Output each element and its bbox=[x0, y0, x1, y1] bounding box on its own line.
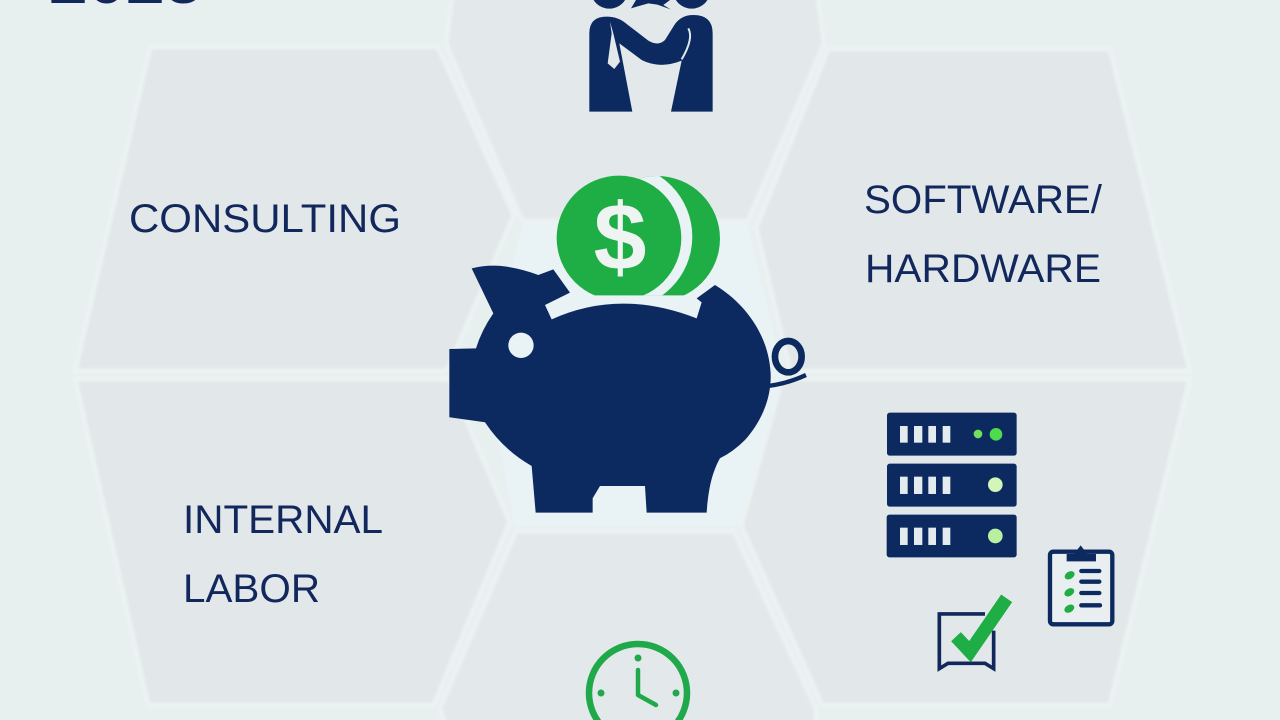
panel: internal labor hexagon bbox=[75, 379, 510, 705]
panel: central hexagon bbox=[486, 224, 784, 526]
panel: top hexagon bbox=[446, 0, 824, 221]
server unit 3 bbox=[887, 515, 1017, 557]
pig tail bbox=[768, 341, 806, 386]
icon: checkbox with checkmark bbox=[939, 598, 1007, 669]
icon: piggy bank bbox=[449, 266, 806, 513]
text: internal labor: INTERNAL bbox=[183, 498, 383, 542]
text: consulting: CONSULTING bbox=[129, 197, 401, 241]
icon: clipboard checklist bbox=[1050, 545, 1112, 624]
panel: software and hardware hexagon bbox=[756, 49, 1190, 371]
icon: coins: $ bbox=[594, 184, 646, 290]
icon: coins bbox=[556, 176, 720, 296]
server unit 1 bbox=[887, 413, 1017, 456]
panel: bottom hexagon bbox=[440, 531, 816, 720]
text: software/hardware: SOFTWARE/ bbox=[864, 178, 1103, 222]
panel: infrastructure hexagon bbox=[741, 379, 1190, 705]
text: software/hardware bbox=[864, 178, 1103, 291]
server unit 2 bbox=[887, 464, 1017, 507]
text: software/hardware: HARDWARE bbox=[865, 247, 1101, 291]
text: internal labor: LABOR bbox=[183, 567, 320, 611]
panel: consulting hexagon bbox=[75, 47, 514, 371]
text: internal labor bbox=[183, 498, 383, 611]
icon: server rack bbox=[887, 413, 1017, 557]
icon: handshake bbox=[589, 0, 713, 112]
icon: clock bbox=[589, 644, 687, 720]
